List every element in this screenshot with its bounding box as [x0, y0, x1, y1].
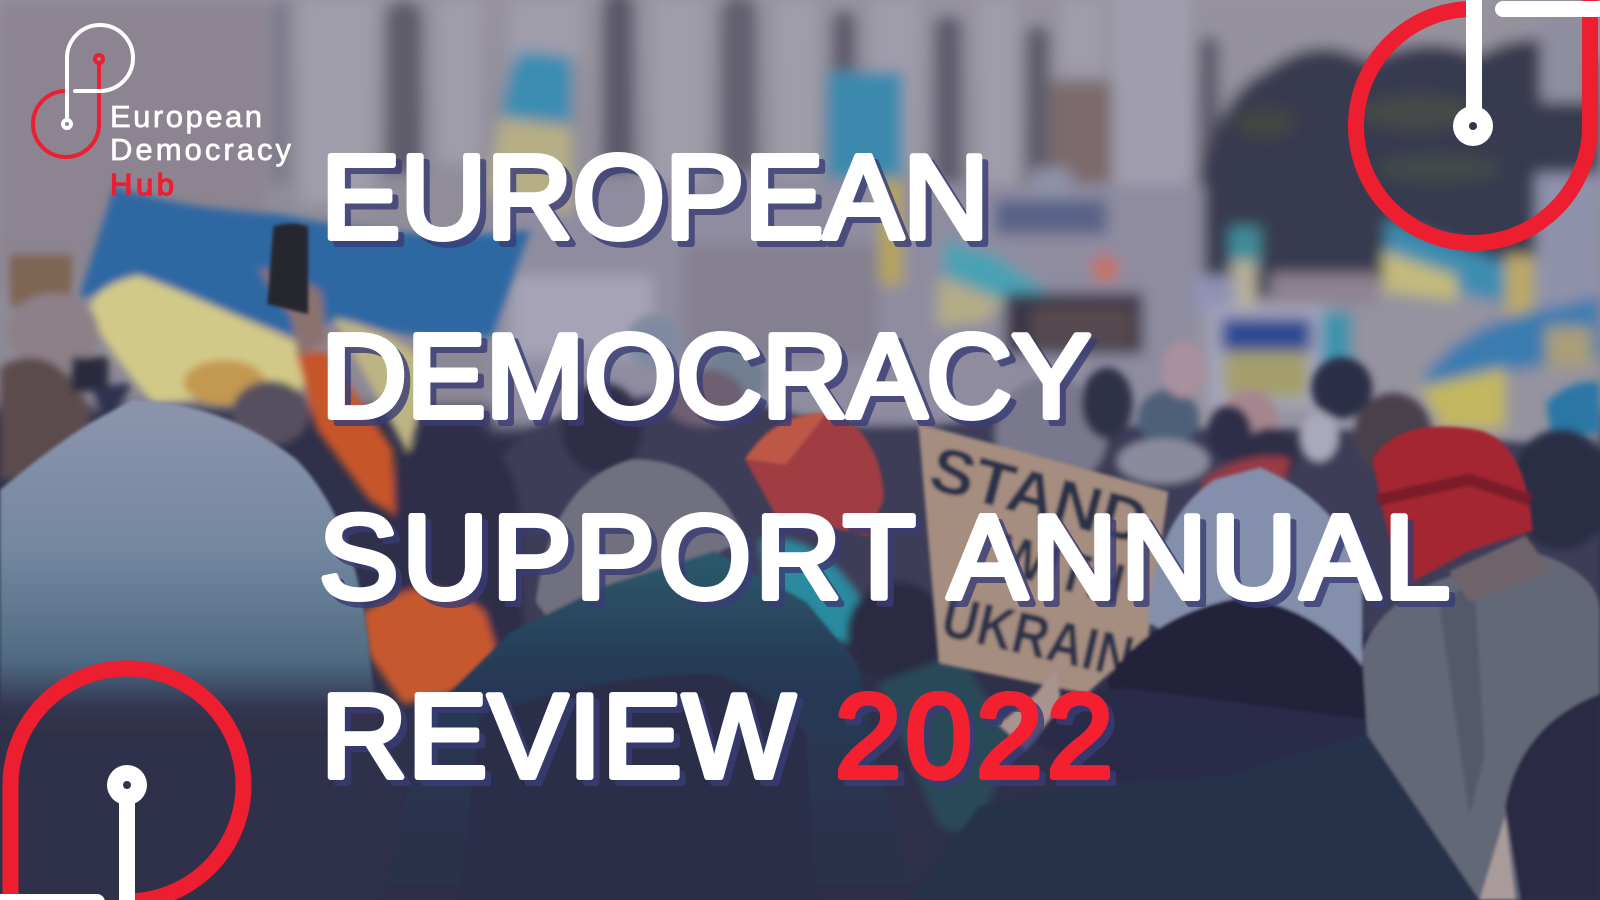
logo: European Democracy Hub: [33, 25, 292, 202]
orange jacket: [362, 589, 500, 704]
title: 2022: [835, 670, 1113, 803]
title: REVIEW: [321, 670, 795, 803]
phone: [267, 223, 308, 314]
background photo: protest crowd with Ukrainian flags: STAND: [923, 434, 1156, 559]
grey beanie: [1148, 467, 1362, 673]
title: [319, 131, 1450, 803]
red hat right: [1372, 427, 1533, 587]
title: DEMOCRACY: [321, 310, 1091, 443]
logo wordmark: Democracy: [110, 132, 292, 167]
teal coat: [380, 551, 918, 900]
distant flags: [500, 51, 571, 122]
red hat centre: [745, 413, 884, 536]
logo wordmark: [110, 99, 292, 202]
background photo: protest crowd with Ukrainian flags: WITH: [992, 522, 1131, 617]
mid crowd: [500, 395, 1600, 633]
raised arm: [296, 352, 395, 515]
graphic: top-right circle motif: [1356, 0, 1600, 243]
hand: [998, 668, 1061, 750]
center person hair: [536, 459, 745, 622]
tree: [1194, 39, 1600, 347]
logo wordmark: European: [110, 99, 262, 134]
banner in the distance: [1209, 306, 1332, 408]
far right dark person: [1505, 694, 1600, 900]
logo mark: [33, 25, 133, 157]
big beanie: [0, 400, 380, 735]
grey jacket right: [1362, 551, 1600, 900]
background photo: protest crowd with Ukrainian flags: UKRAIN: [936, 582, 1140, 691]
left side people: [10, 255, 71, 306]
big blue flag: [79, 187, 531, 338]
dark cap: [847, 582, 949, 684]
dark hair person: [393, 429, 526, 653]
graphic: bottom-left circle motif: [0, 668, 244, 900]
mid ground haze: [490, 184, 1204, 429]
logo wordmark: Hub: [110, 167, 174, 202]
title: SUPPORT ANNUAL: [319, 491, 1450, 624]
teal jacket: [760, 540, 862, 643]
title: EUROPEAN: [321, 131, 989, 264]
sign: [918, 423, 1168, 694]
billboard and light: [1005, 293, 1143, 354]
black hood and jacket: [1107, 597, 1369, 719]
